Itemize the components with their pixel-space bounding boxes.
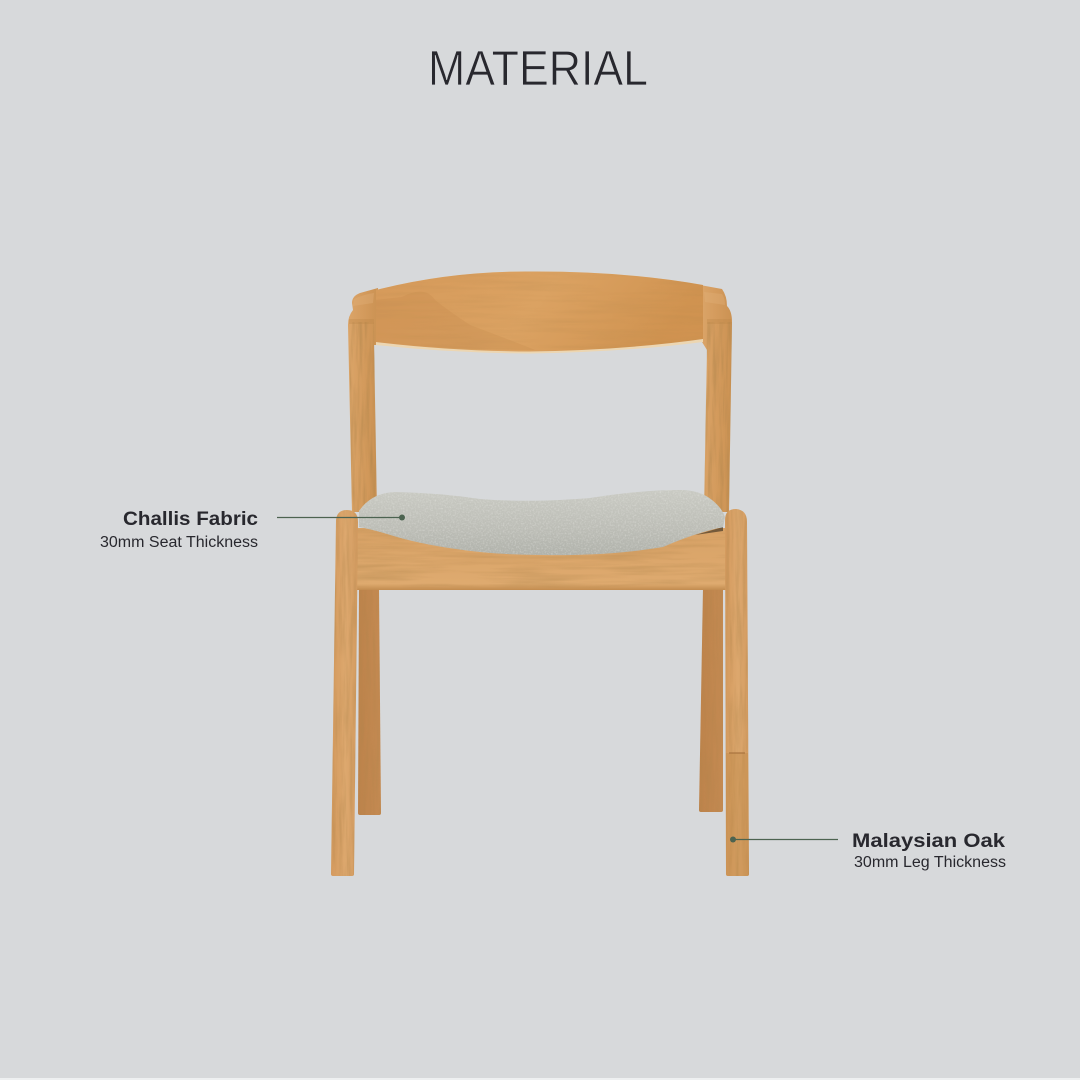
leader line: oak [730, 836, 838, 842]
backrest panel [376, 271, 703, 354]
callout: Malaysian Oak [730, 830, 1006, 871]
rear left leg [358, 588, 381, 815]
oak name: Malaysian Oak [852, 830, 1005, 852]
oak detail: 30mm Leg Thickness [854, 854, 1006, 871]
callout: Challis Fabric [100, 508, 405, 551]
title: MATERIAL [428, 42, 648, 96]
left back post [348, 288, 378, 512]
rear right leg [699, 588, 723, 812]
left front leg [331, 510, 358, 876]
fabric detail: 30mm Seat Thickness [100, 534, 258, 551]
leader line: fabric [277, 514, 405, 520]
right back post [700, 285, 732, 512]
seat cushion [359, 490, 725, 555]
seat rail [357, 527, 726, 590]
fabric name: Challis Fabric [123, 508, 258, 530]
chair [331, 271, 749, 876]
right front leg [725, 509, 749, 876]
